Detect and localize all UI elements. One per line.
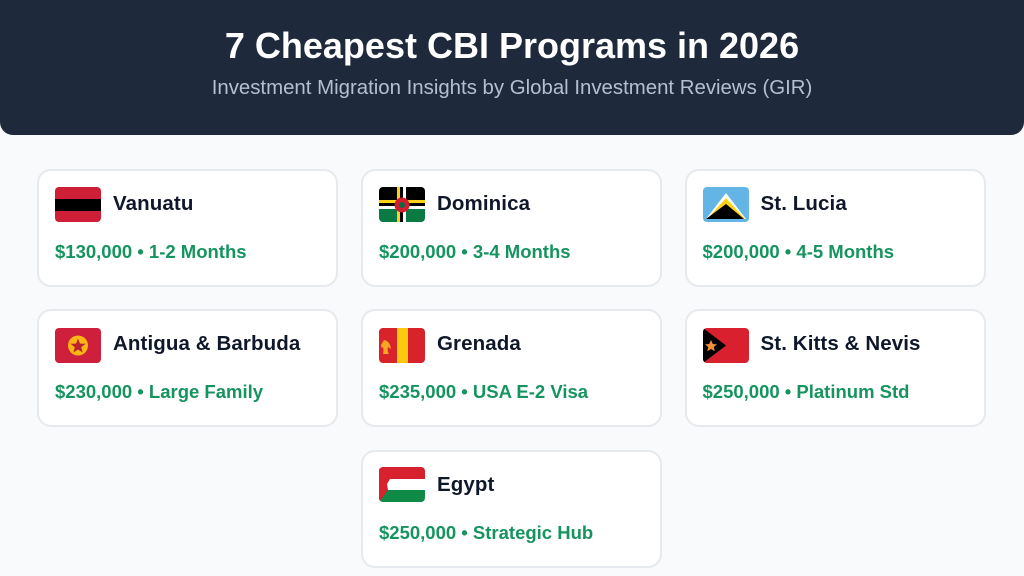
flag: Vanuatu	[55, 187, 101, 222]
flag: Antigua & Barbuda	[55, 328, 101, 363]
country name: Egypt	[437, 473, 494, 496]
card: Antigua & Barbuda	[37, 309, 338, 427]
subtitle: Investment Migration Insights by Global Investment Reviews (GIR)	[212, 77, 812, 99]
price and detail: $230,000 • Large Family	[55, 381, 263, 402]
price and detail: $200,000 • 4-5 Months	[702, 241, 894, 262]
country name: Dominica	[437, 192, 530, 215]
card: St. Kitts & Nevis	[685, 309, 986, 427]
price and detail: $250,000 • Platinum Std	[702, 381, 909, 402]
flag: Egypt	[379, 467, 425, 502]
card: Grenada	[361, 309, 662, 427]
country name: Vanuatu	[113, 192, 193, 215]
country name: Antigua & Barbuda	[113, 332, 300, 355]
header banner	[0, 0, 1024, 135]
card: Dominica	[361, 169, 662, 287]
price and detail: $235,000 • USA E-2 Visa	[379, 381, 588, 402]
card: Egypt	[361, 450, 662, 568]
country name: Grenada	[437, 332, 521, 355]
flag: St. Kitts & Nevis	[703, 328, 749, 363]
title: 7 Cheapest CBI Programs in 2026	[225, 25, 799, 66]
flag: Grenada	[379, 328, 425, 363]
flag: St. Lucia	[703, 187, 749, 222]
flag: Dominica	[379, 187, 425, 222]
price and detail: $250,000 • Strategic Hub	[379, 522, 593, 543]
card: Vanuatu	[37, 169, 338, 287]
price and detail: $130,000 • 1-2 Months	[55, 241, 247, 262]
card: St. Lucia	[685, 169, 986, 287]
country name: St. Lucia	[760, 192, 847, 215]
price and detail: $200,000 • 3-4 Months	[379, 241, 571, 262]
country name: St. Kitts & Nevis	[760, 332, 921, 355]
